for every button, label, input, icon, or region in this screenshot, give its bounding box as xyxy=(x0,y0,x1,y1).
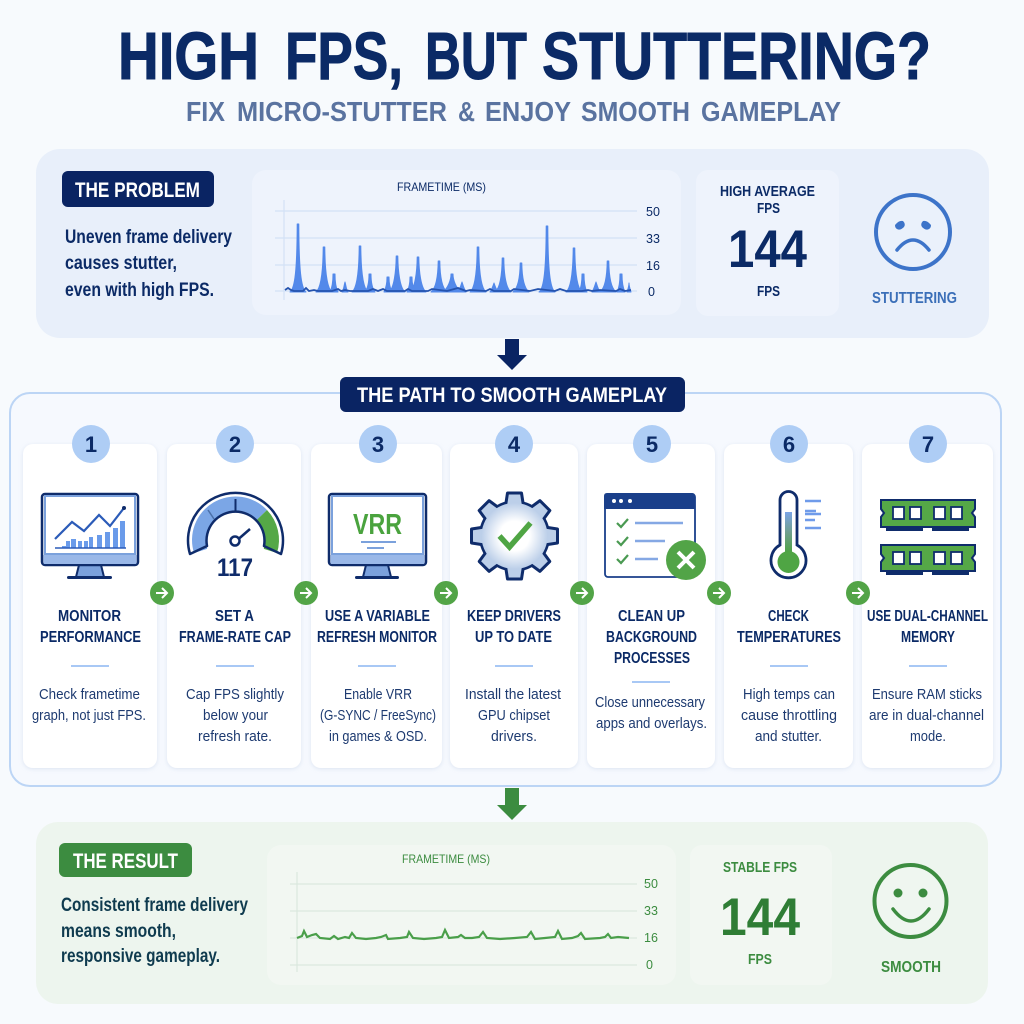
step 7 text: USE DUAL-CHANNEL xyxy=(867,608,988,625)
chart: stable frametime: 0 xyxy=(646,958,653,972)
title xyxy=(118,19,931,94)
step 5 text xyxy=(595,608,707,732)
step 1 text xyxy=(32,608,146,724)
subtitle: FIX xyxy=(186,96,225,127)
RAM stick top xyxy=(881,500,975,531)
problem description xyxy=(65,227,232,301)
step 3 text: Enable VRR xyxy=(344,686,412,703)
chart: uneven frametime: 50 xyxy=(646,205,660,219)
step 6 text: CHECK xyxy=(768,608,810,625)
stat card: stable fps: 144 xyxy=(720,888,800,947)
step 3 xyxy=(311,425,442,768)
stat card: high average fps xyxy=(696,170,839,316)
badge: the result xyxy=(59,843,192,877)
title: FPS, xyxy=(285,19,403,94)
icon: VRR monitor: VRR xyxy=(353,509,402,541)
step 2 text: SET A xyxy=(215,608,254,625)
banner heading: THE PATH TO SMOOTH GAMEPLAY xyxy=(357,384,667,407)
step 7: 7 xyxy=(922,432,934,457)
result description: responsive gameplay. xyxy=(61,946,220,967)
label: smooth: SMOOTH xyxy=(881,959,941,976)
badge: the problem xyxy=(62,171,214,207)
chart: uneven frametime: FRAMETIME (MS) xyxy=(397,180,486,194)
panel: the path to smooth gameplay xyxy=(10,377,1001,786)
step 5 text: CLEAN UP xyxy=(618,608,685,625)
chart: stable frametime: 16 xyxy=(644,931,658,945)
step 7 text: are in dual-channel xyxy=(869,707,984,724)
icon: process checklist with close badge xyxy=(604,493,706,580)
result description xyxy=(61,895,248,967)
icon: VRR monitor xyxy=(329,494,426,579)
step 7 xyxy=(862,425,993,768)
panel: the result xyxy=(36,822,988,1004)
step 4: 4 xyxy=(508,432,521,457)
step 3 text: REFRESH MONITOR xyxy=(317,629,437,646)
step 1 text: Check frametime xyxy=(39,686,140,703)
step 1: 1 xyxy=(85,432,97,457)
step 6 text: High temps can xyxy=(743,686,835,703)
panel: the problem xyxy=(36,149,989,338)
step 4 text: KEEP DRIVERS xyxy=(467,608,561,625)
step 7 text xyxy=(867,608,988,745)
icon: gear with check xyxy=(472,493,558,579)
step 4 text: Install the latest xyxy=(465,686,562,703)
arrow: problem to path xyxy=(497,339,527,370)
step 4 text: drivers. xyxy=(491,728,537,745)
step 6 xyxy=(724,425,853,768)
step 6 text: and stutter. xyxy=(755,728,822,745)
subtitle: GAMEPLAY xyxy=(701,96,841,127)
icon: speedometer gauge: 117 xyxy=(217,554,253,582)
step 5 text: Close unnecessary xyxy=(595,694,705,711)
step 1 text: PERFORMANCE xyxy=(40,629,141,646)
problem description: Uneven frame delivery xyxy=(65,227,232,248)
stat card: high average fps: FPS xyxy=(757,200,780,217)
step 5 xyxy=(587,425,715,768)
stat card: high average fps: FPS xyxy=(757,283,780,300)
step 1 xyxy=(23,425,157,768)
subtitle xyxy=(186,96,841,127)
step 2 text: Cap FPS slightly xyxy=(186,686,284,703)
step 2 text: FRAME-RATE CAP xyxy=(179,629,291,646)
icon: two RAM sticks xyxy=(881,500,975,575)
label: stuttering: STUTTERING xyxy=(872,290,957,307)
banner heading xyxy=(340,377,685,412)
chart: stable frametime: 50 xyxy=(644,877,658,891)
title: HIGH xyxy=(118,19,259,94)
badge: the result: THE RESULT xyxy=(73,850,178,873)
icon: monitor with chart xyxy=(42,494,138,579)
result description: means smooth, xyxy=(61,921,176,942)
step 4 text xyxy=(465,608,562,745)
step 2 text: below your xyxy=(203,707,268,724)
RAM stick bottom xyxy=(881,545,975,575)
step 3 text: in games & OSD. xyxy=(329,728,427,745)
arrow: path to result xyxy=(497,788,527,820)
step connector arrows xyxy=(150,581,870,605)
icon: smiling face xyxy=(874,865,946,937)
subtitle: & xyxy=(458,96,475,127)
step 1 text: MONITOR xyxy=(58,608,121,625)
step 2 text xyxy=(179,608,291,745)
subtitle: SMOOTH xyxy=(581,96,690,127)
title: STUTTERING? xyxy=(542,19,931,94)
step 6 text xyxy=(737,608,841,745)
badge: the problem: THE PROBLEM xyxy=(75,179,200,202)
step 1 text: graph, not just FPS. xyxy=(32,707,146,724)
chart: uneven frametime: 16 xyxy=(646,259,660,273)
stat card: high average fps: 144 xyxy=(728,220,807,279)
step 7 text: mode. xyxy=(910,728,946,745)
step 4 text: UP TO DATE xyxy=(475,629,552,646)
step 2 text: refresh rate. xyxy=(198,728,272,745)
step 2: 2 xyxy=(229,432,241,457)
chart: uneven frametime xyxy=(252,170,681,315)
step 3 text: (G-SYNC / FreeSync) xyxy=(320,707,436,724)
step 3 text: USE A VARIABLE xyxy=(325,608,430,625)
icon: sad face xyxy=(876,195,950,269)
title: BUT xyxy=(425,19,527,94)
result description: Consistent frame delivery xyxy=(61,895,248,916)
step 3 text xyxy=(317,608,437,745)
problem description: causes stutter, xyxy=(65,253,177,274)
stat card: stable fps xyxy=(690,845,832,985)
step 4 text: GPU chipset xyxy=(478,707,551,724)
chart: stable frametime xyxy=(267,845,676,985)
stat card: high average fps: HIGH AVERAGE xyxy=(720,183,815,200)
chart: uneven frametime: 0 xyxy=(648,285,655,299)
step 6 text: TEMPERATURES xyxy=(737,629,841,646)
problem description: even with high FPS. xyxy=(65,280,214,301)
step 4 xyxy=(450,425,578,768)
step 6: 6 xyxy=(783,432,795,457)
step 6 text: cause throttling xyxy=(741,707,837,724)
step 7 text: MEMORY xyxy=(901,629,956,646)
icon: thermometer xyxy=(771,492,821,578)
icon: speedometer gauge xyxy=(188,493,283,582)
subtitle: ENJOY xyxy=(485,96,571,127)
stat card: stable fps: STABLE FPS xyxy=(723,860,797,876)
step 2 xyxy=(167,425,301,768)
chart: stable frametime: 33 xyxy=(644,904,658,918)
step 7 text: Ensure RAM sticks xyxy=(872,686,982,703)
subtitle: MICRO-STUTTER xyxy=(237,96,447,127)
step 3: 3 xyxy=(372,432,384,457)
step 5 text: BACKGROUND xyxy=(606,629,697,646)
chart: stable frametime: FRAMETIME (MS) xyxy=(402,852,490,866)
step 5 text: apps and overlays. xyxy=(596,715,707,732)
step 5 text: PROCESSES xyxy=(614,650,690,667)
chart: uneven frametime: 33 xyxy=(646,232,660,246)
step 5: 5 xyxy=(646,432,658,457)
stat card: stable fps: FPS xyxy=(748,952,772,968)
